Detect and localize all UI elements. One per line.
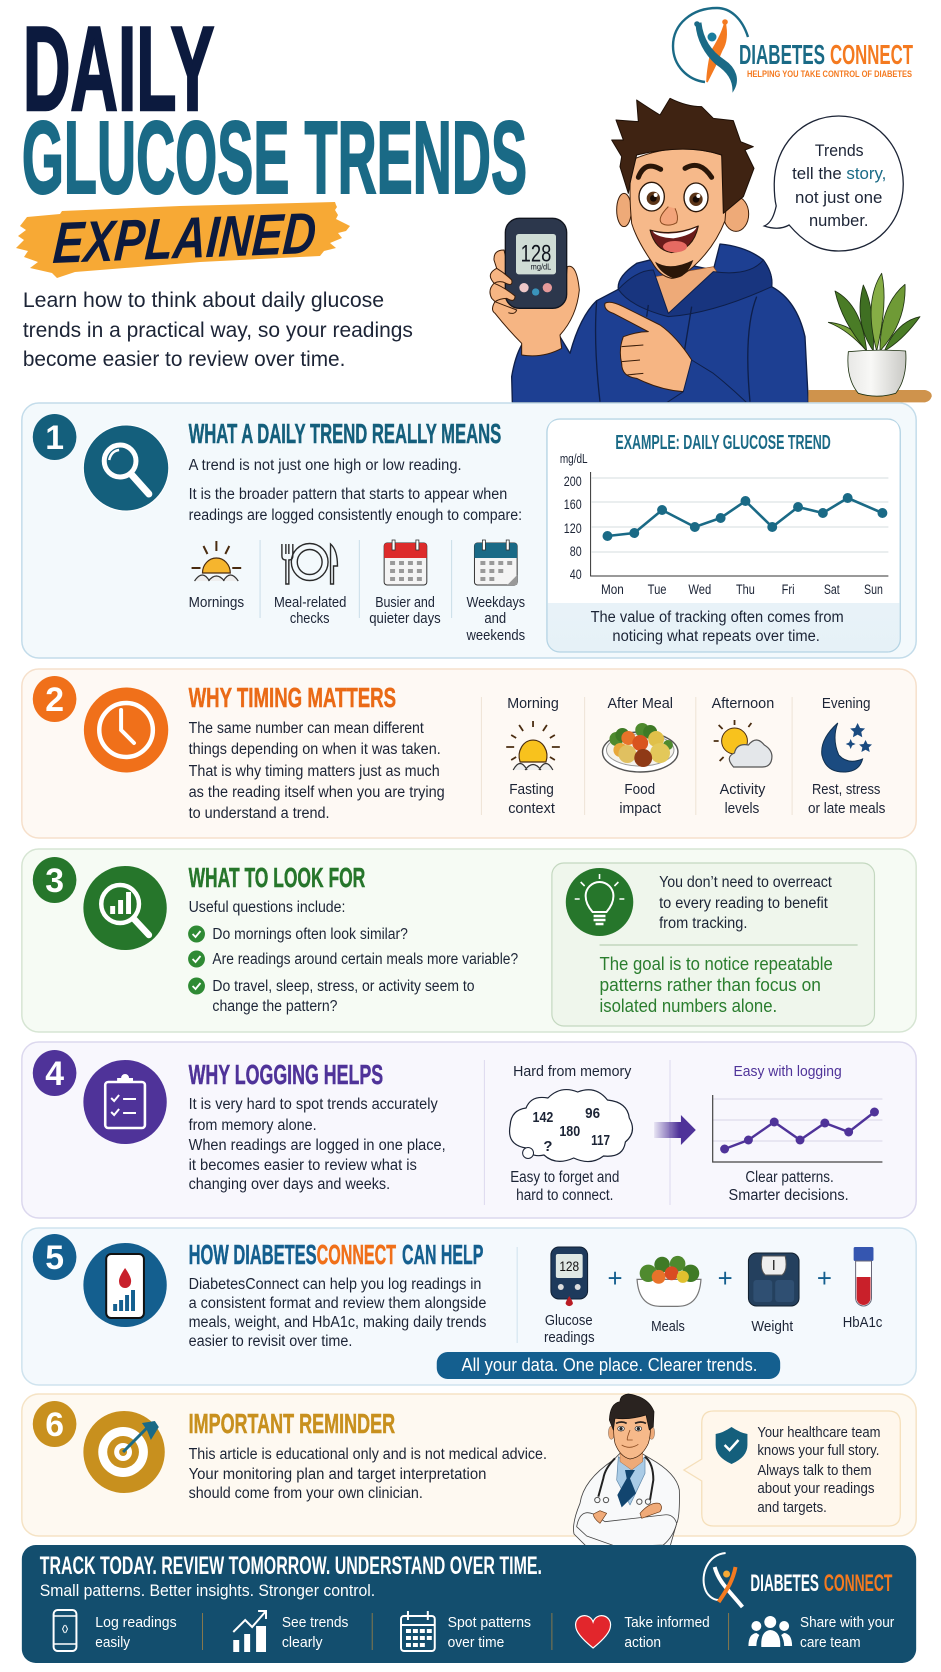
footer banner	[22, 1545, 916, 1663]
intro text: Learn how to think about daily glucose	[23, 289, 384, 312]
data sources row: +	[718, 1265, 733, 1293]
icon: target with dart	[83, 1411, 165, 1493]
item: log readings: easily	[95, 1634, 131, 1651]
logo: diabetes connect	[673, 8, 913, 91]
panel 2: why timing matters	[22, 669, 916, 838]
icon labels: Busier and	[375, 595, 435, 611]
item: see trends	[233, 1611, 348, 1652]
body text 4: When readings are logged in one place,	[189, 1137, 446, 1154]
icon: blood test tube	[854, 1247, 873, 1306]
body text 6: This article is educational only and is not medical advice.	[189, 1446, 547, 1463]
logging side: mini line chart	[713, 1063, 882, 1204]
body text 1: It is the broader pattern that starts to appear when	[189, 486, 507, 503]
number badge 5: 5	[45, 1239, 64, 1277]
body text 2: to understand a trend.	[189, 805, 330, 822]
number badge 6	[33, 1401, 76, 1447]
illustration: doctor with crossed arms	[573, 1394, 679, 1547]
body text 2: things depending on when it was taken.	[189, 741, 441, 758]
icon: meals bowl	[637, 1256, 701, 1306]
intro text: become easier to review over time.	[23, 348, 345, 371]
line chart: Fri	[782, 581, 795, 597]
callout card: overreact: You don’t need to overreact	[659, 874, 832, 891]
heading 5: CONNECT	[317, 1239, 396, 1270]
icon labels: weekends	[466, 628, 525, 644]
item: care team: care team	[800, 1634, 861, 1651]
item: see trends: clearly	[282, 1634, 323, 1651]
icon: glucose meter	[551, 1247, 588, 1306]
line chart: Wed	[688, 581, 711, 597]
number badge 1	[33, 414, 76, 460]
icon: red calendar	[384, 540, 427, 585]
body text 4: it becomes easier to review what is	[189, 1157, 417, 1174]
icon labels: Mornings	[189, 595, 244, 611]
footer logo: DIABETES	[750, 1570, 819, 1597]
data sources row: +	[607, 1265, 623, 1293]
body text 6: should come from your own clinician.	[189, 1485, 423, 1502]
icon labels: Meal-related	[274, 595, 346, 611]
number badge 4: 4	[45, 1055, 64, 1093]
memory side: thought cloud: ?	[543, 1138, 552, 1155]
memory side: thought cloud: Easy to forget and	[510, 1169, 619, 1186]
item: log readings	[54, 1610, 177, 1651]
body text 2: That is why timing matters just as much	[189, 763, 440, 780]
icon: food plate	[603, 723, 678, 772]
icon: glucose meter: 128	[559, 1258, 579, 1274]
data sources row: readings	[544, 1330, 595, 1346]
timing columns: or late meals	[808, 800, 885, 817]
heading 4: WHY LOGGING HELPS	[189, 1059, 383, 1090]
item: informed action: Take informed	[624, 1614, 710, 1631]
number badge 5	[33, 1234, 76, 1280]
timing columns	[481, 695, 885, 817]
body text 2: The same number can mean different	[189, 720, 424, 737]
speech bubble: Trends	[815, 141, 864, 160]
heading 5: CAN HELP	[402, 1239, 483, 1270]
footer logo: CONNECT	[824, 1570, 893, 1597]
item: log readings: Log readings	[95, 1614, 177, 1631]
body text 1: A trend is not just one high or low reading.	[189, 457, 462, 474]
heading 3: WHAT TO LOOK FOR	[189, 862, 365, 893]
footer heading: TRACK TODAY. REVIEW TOMORROW. UNDERSTAND OVER TIME.	[40, 1552, 542, 1580]
item: see trends: See trends	[282, 1614, 348, 1631]
data sources row: HbA1c	[843, 1315, 882, 1331]
body text 4: It is very hard to spot trends accurately	[189, 1096, 438, 1113]
logging side: mini line chart: Smarter decisions.	[729, 1187, 849, 1204]
icon labels: checks	[290, 611, 330, 627]
callout: healthcare team: about your readings	[757, 1481, 874, 1497]
data sources row	[544, 1247, 882, 1346]
number badge 3: 3	[45, 862, 64, 900]
icon: weight scale	[748, 1253, 799, 1306]
line chart	[560, 452, 888, 597]
logging side: mini line chart: Clear patterns.	[745, 1169, 834, 1186]
panel 4: why logging helps	[22, 1042, 916, 1218]
intro text	[23, 289, 413, 371]
chart card: example daily glucose trend	[547, 419, 900, 652]
speech bubble: number.	[809, 211, 869, 230]
line chart: 120	[564, 520, 582, 536]
memory side: thought cloud: 142	[533, 1109, 553, 1126]
footer tagline: Small patterns. Better insights. Stronger control.	[40, 1581, 375, 1600]
icon labels: Weekdays	[467, 595, 525, 611]
data sources row: Weight	[751, 1319, 793, 1335]
panel 5: how diabetesconnect can help	[22, 1228, 916, 1385]
callout card: overreact: The goal is to notice repeatable	[600, 953, 833, 974]
icon: sun and cloud	[714, 720, 772, 767]
title: daily: DAILY	[23, 3, 214, 136]
body text 4: changing over days and weeks.	[189, 1176, 390, 1193]
timing columns: impact	[619, 800, 662, 817]
timing columns: Evening	[822, 695, 871, 712]
panel 1: what a daily trend means	[22, 403, 916, 658]
chart caption: noticing what repeats over time.	[612, 628, 820, 645]
timing columns: Afternoon	[712, 695, 774, 712]
memory side: thought cloud	[510, 1063, 632, 1204]
body text 1	[189, 457, 522, 524]
item: spot patterns: over time	[448, 1634, 504, 1651]
callout: healthcare team: knows your full story.	[757, 1443, 879, 1459]
line chart: Mon	[601, 581, 624, 597]
body text 5: meals, weight, and HbA1c, making daily trends	[189, 1314, 487, 1331]
item: informed action: action	[624, 1634, 661, 1651]
title: explained on brush stroke: EXPLAINED	[51, 201, 318, 276]
line chart: Tue	[648, 581, 667, 597]
timing columns: Food	[624, 781, 655, 798]
intro text: trends in a practical way, so your readings	[23, 319, 413, 342]
body text 5: easier to revisit over time.	[189, 1333, 352, 1350]
callout: healthcare team	[684, 1411, 900, 1526]
speech bubble: not just one	[795, 188, 882, 207]
line chart: Sun	[864, 581, 883, 597]
illustration: smiling man holding glucose meter: mg/dL	[531, 262, 552, 271]
line chart: Thu	[736, 581, 755, 597]
footer logo	[704, 1553, 893, 1607]
item: care team	[748, 1614, 894, 1651]
callout: healthcare team: and targets.	[757, 1500, 827, 1516]
timing columns: Fasting	[509, 781, 554, 798]
panel 3: what to look for	[22, 849, 916, 1032]
callout card: overreact: patterns rather than focus on	[600, 974, 821, 995]
memory side: thought cloud: 180	[559, 1123, 580, 1140]
icon labels: and	[484, 611, 506, 627]
number badge 3	[33, 857, 76, 903]
line chart: Sat	[824, 581, 840, 597]
logging side: mini line chart: Easy with logging	[734, 1063, 842, 1080]
illustration: smiling man holding glucose meter: 128	[521, 241, 551, 268]
icon: light bulb	[566, 868, 633, 936]
question list: Do travel, sleep, stress, or activity seem to	[212, 978, 474, 995]
icon: magnifier with bars	[83, 866, 167, 950]
banner: all your data: All your data. One place. Clearer trends.	[462, 1355, 757, 1375]
callout: healthcare team: Always talk to them	[757, 1463, 872, 1479]
timing columns: After Meal	[607, 695, 673, 712]
item: informed action	[576, 1614, 710, 1651]
item: spot patterns: Spot patterns	[448, 1614, 531, 1631]
callout: healthcare team: Your healthcare team	[757, 1425, 880, 1441]
logo: diabetes connect: DIABETES	[739, 39, 825, 70]
speech bubble: tell the story,	[792, 164, 886, 183]
illustration: smiling man holding glucose meter	[490, 98, 808, 403]
chart caption: The value of tracking often comes from	[591, 609, 844, 626]
icon: clipboard checklist	[83, 1060, 167, 1144]
timing columns: Activity	[720, 781, 766, 798]
question list: Useful questions include:	[189, 899, 345, 916]
body text 6: Your monitoring plan and target interpretation	[189, 1466, 486, 1483]
number badge 4	[33, 1050, 76, 1096]
item: care team: Share with your	[800, 1614, 894, 1631]
body text 4: from memory alone.	[189, 1117, 317, 1134]
icon labels: quieter days	[369, 611, 441, 627]
line chart: 200	[564, 473, 582, 489]
body text 6	[189, 1446, 547, 1502]
timing columns: levels	[725, 800, 759, 817]
icon: crescent moon	[822, 723, 872, 772]
icon: shield check	[716, 1427, 747, 1464]
callout card: overreact: from tracking.	[659, 915, 747, 932]
item: spot patterns	[401, 1611, 531, 1651]
line chart: mg/dL	[560, 452, 588, 466]
question list: Do mornings often look similar?	[212, 926, 408, 943]
callout card: overreact	[552, 863, 874, 1026]
icon: morning sun	[192, 541, 241, 581]
question list: Are readings around certain meals more variable?	[212, 951, 518, 968]
panel 6: important reminder	[22, 1394, 916, 1547]
line chart: 80	[570, 543, 582, 559]
memory side: thought cloud: 117	[591, 1132, 610, 1149]
memory side: thought cloud: hard to connect.	[516, 1187, 613, 1204]
banner: all your data	[437, 1352, 780, 1379]
question list: change the pattern?	[212, 998, 338, 1015]
icon: sun	[506, 721, 560, 770]
body text 2	[189, 720, 445, 822]
heading 2: WHY TIMING MATTERS	[189, 682, 396, 713]
timing columns: context	[508, 800, 556, 817]
body text 1: readings are logged consistently enough to compare:	[189, 507, 522, 524]
icon row: comparison contexts	[189, 540, 525, 644]
timing columns: Morning	[507, 695, 559, 712]
callout card: overreact: to every reading to benefit	[659, 895, 828, 912]
heading 1: WHAT A DAILY TREND REALLY MEANS	[189, 418, 501, 449]
icon labels	[189, 595, 525, 644]
line chart: 160	[564, 496, 582, 512]
timing columns: Rest, stress	[812, 781, 880, 798]
arrow	[654, 1115, 696, 1145]
question list	[188, 899, 518, 1015]
body text 5: a consistent format and review them alongside	[189, 1295, 486, 1312]
icon: clock	[84, 688, 168, 772]
speech bubble	[764, 116, 903, 251]
data sources row: Meals	[651, 1319, 685, 1335]
data sources row: +	[817, 1265, 832, 1293]
memory side: thought cloud: Hard from memory	[513, 1063, 632, 1080]
data sources row: Glucose	[545, 1313, 593, 1329]
body text 2: as the reading itself when you are trying	[189, 784, 445, 801]
heading 5: HOW DIABETES	[189, 1239, 317, 1270]
number badge 2: 2	[45, 681, 64, 719]
callout card: overreact: isolated numbers alone.	[600, 995, 777, 1016]
chart caption	[591, 609, 844, 645]
illustration: potted plant on shelf	[808, 273, 932, 402]
body text 5: DiabetesConnect can help you log readings in	[189, 1276, 481, 1293]
number badge 2	[33, 676, 76, 722]
icon: fork and plate	[282, 544, 337, 584]
heading 6: IMPORTANT REMINDER	[189, 1408, 395, 1439]
body text 4	[189, 1096, 446, 1193]
line chart: 40	[570, 566, 582, 582]
icon: smartphone	[83, 1243, 167, 1327]
memory side: thought cloud: 96	[585, 1105, 600, 1122]
icon: magnifying glass	[83, 425, 169, 511]
number badge 6: 6	[45, 1406, 64, 1444]
number badge 1: 1	[45, 419, 64, 457]
body text 5	[189, 1276, 487, 1350]
icon: blue calendar	[474, 540, 517, 585]
